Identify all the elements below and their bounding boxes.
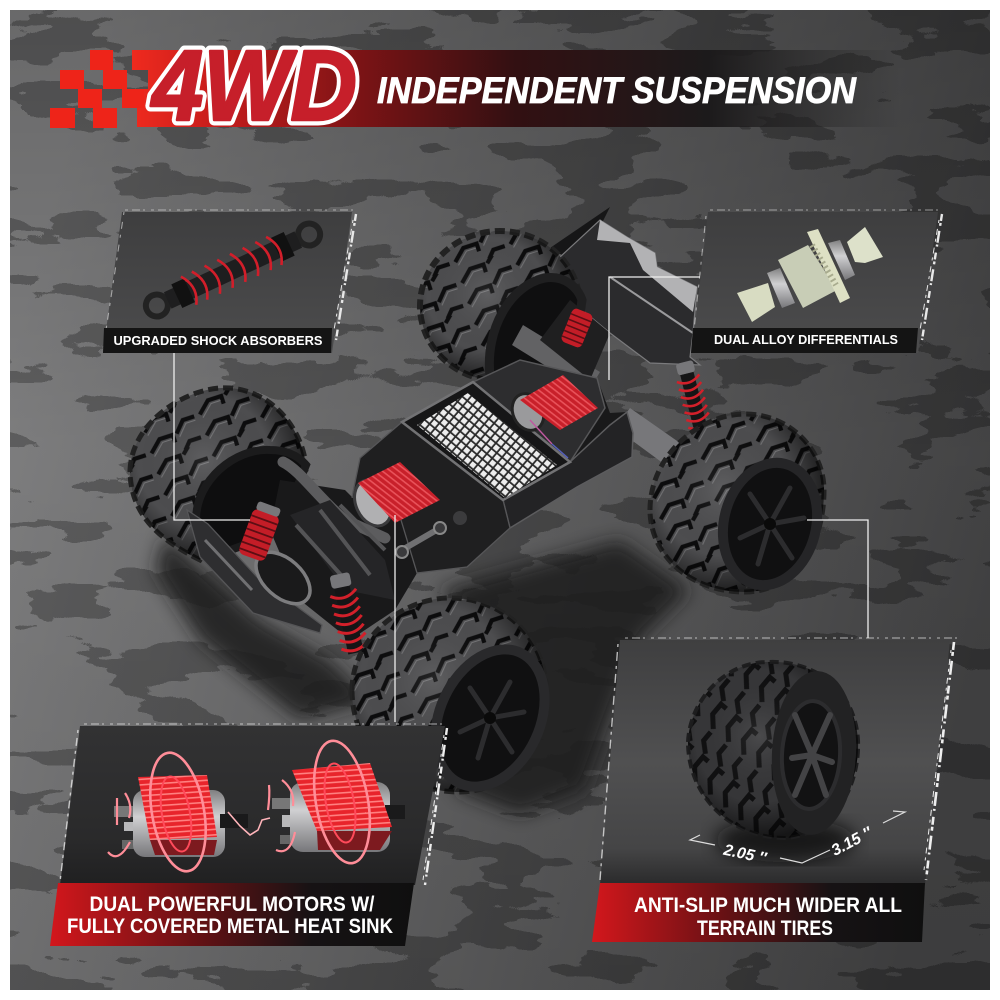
shock: left — [238, 500, 283, 562]
car — [130, 207, 830, 815]
battery metal plate — [417, 393, 557, 498]
tire: right — [650, 414, 830, 595]
brush edges — [106, 210, 356, 340]
label: DUAL POWERFUL MOTORS W/ — [90, 893, 375, 916]
brush edges — [694, 210, 942, 340]
logo: 4WD fill: 4WD — [150, 30, 357, 142]
battery box — [402, 382, 570, 500]
motor: front heat sink — [347, 462, 440, 532]
motor right — [268, 736, 405, 868]
shock absorber part — [140, 215, 326, 325]
right axle — [615, 408, 690, 472]
front suspension arms — [187, 462, 395, 633]
label: DUAL ALLOY DIFFERENTIALS — [714, 332, 898, 347]
shock: front — [326, 571, 369, 656]
label: TERRAIN TIRES — [697, 917, 833, 940]
car shadow — [155, 535, 690, 815]
tire: product view — [688, 662, 860, 838]
dimension: width: 2.05 ″ — [721, 842, 769, 868]
icon: racing checker flag — [50, 50, 144, 128]
tire: rear — [420, 231, 582, 382]
brush edges — [60, 724, 447, 885]
panel: tires — [592, 638, 958, 942]
shock: right — [673, 359, 713, 433]
spark between motors — [228, 812, 270, 835]
header: 4WD independent suspension — [50, 30, 900, 142]
header band — [132, 50, 900, 127]
panel: motors — [50, 724, 447, 946]
label strip — [592, 883, 925, 942]
dimension marks — [690, 811, 905, 863]
label strip — [50, 883, 414, 946]
tire: front — [352, 598, 566, 804]
dimension: diameter: 3.15 ″ — [829, 824, 876, 860]
label: FULLY COVERED METAL HEAT SINK — [67, 915, 393, 938]
label strip — [691, 328, 918, 353]
motor left — [108, 748, 248, 876]
callout lines — [174, 277, 868, 722]
heading: INDEPENDENT SUSPENSION — [377, 70, 857, 111]
tire shadow — [715, 818, 855, 862]
shock: rear — [560, 307, 594, 349]
tire: left — [130, 388, 306, 560]
brush edges — [600, 638, 958, 880]
rear spoiler — [550, 207, 700, 365]
chassis — [270, 360, 633, 640]
label strip — [103, 328, 332, 353]
label: ANTI-SLIP MUCH WIDER ALL — [634, 894, 902, 917]
motor: rear heat sink — [506, 375, 598, 458]
rear axle — [512, 325, 600, 392]
differential part — [737, 227, 883, 322]
panel: differentials — [691, 210, 942, 353]
logo: 4WD: 4WD — [150, 30, 357, 142]
panel: shock absorbers — [103, 210, 356, 353]
label: UPGRADED SHOCK ABSORBERS — [114, 333, 323, 348]
